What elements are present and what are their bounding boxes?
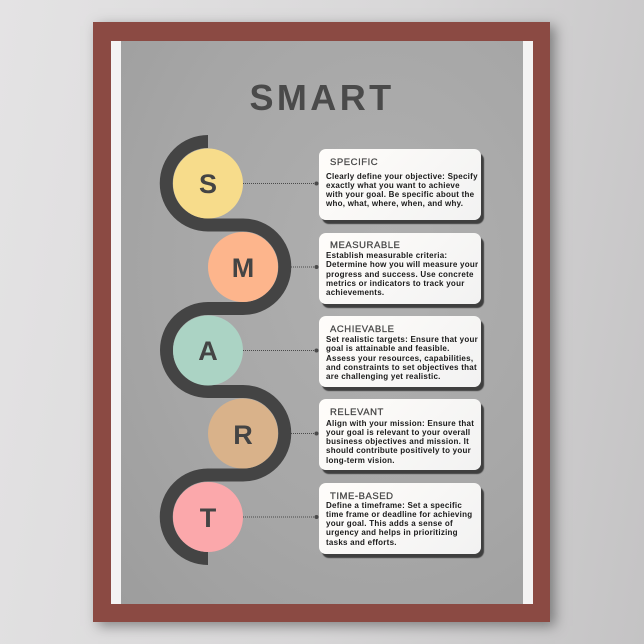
circle T: T [200, 503, 217, 533]
body: business objectives and mission. It [326, 437, 469, 446]
body: are challenging yet realistic. [326, 372, 441, 381]
winding path [166, 142, 285, 558]
circle S [173, 148, 243, 218]
body: your goal is relevant to your overall [326, 428, 470, 437]
body [326, 500, 472, 547]
circle M [208, 232, 278, 302]
circle A: A [198, 336, 218, 366]
body: long-term vision. [326, 456, 395, 465]
circle A [173, 316, 243, 386]
body: Define a timeframe: Set a specific [326, 500, 462, 510]
body [326, 172, 478, 208]
body: who, what, where, when, and why. [326, 199, 463, 208]
connectors [243, 182, 318, 519]
white mat [111, 41, 533, 604]
body: Clearly define your objective: Specify [326, 172, 478, 180]
body: goal is attainable and feasible. [326, 344, 450, 353]
card: measurable [319, 233, 481, 304]
heading: ACHIEVABLE [330, 324, 394, 335]
body: progress and success. Use concrete [326, 270, 474, 279]
body [326, 418, 474, 465]
heading: SPECIFIC [330, 157, 378, 168]
circle S: S [199, 169, 217, 199]
body: your goal. This adds a sense of [326, 519, 453, 528]
gray panel [121, 41, 523, 604]
circle R [208, 398, 278, 468]
card: relevant [319, 399, 481, 470]
body: should contribute positively to your [326, 446, 471, 455]
circle R: R [233, 420, 253, 450]
body: metrics or indicators to track your [326, 279, 465, 288]
body [326, 335, 478, 381]
body: Determine how you will measure your [326, 260, 478, 269]
body: Establish measurable criteria: [326, 251, 447, 260]
body: exactly what you want to achieve [326, 181, 460, 190]
body: and constraints to set objectives that [326, 363, 477, 372]
body: time frame or deadline for achieving [326, 510, 472, 519]
body: tasks and efforts. [326, 538, 397, 547]
title: SMART [250, 77, 394, 118]
poster frame [93, 22, 550, 622]
body: with your goal. Be specific about the [326, 190, 474, 199]
body: Set realistic targets: Ensure that your [326, 335, 478, 344]
body: Assess your resources, capabilities, [326, 354, 473, 363]
circle M: M [232, 253, 254, 283]
body: achievements. [326, 288, 384, 297]
heading: RELEVANT [330, 407, 384, 418]
body [326, 251, 478, 297]
card: specific [319, 149, 481, 220]
heading: MEASURABLE [330, 240, 400, 251]
card: time-based [319, 483, 481, 554]
card: achievable [319, 316, 481, 387]
circle T [173, 482, 243, 552]
body: urgency and helps in prioritizing [326, 528, 458, 537]
heading: TIME-BASED [330, 491, 394, 502]
body: Align with your mission: Ensure that [326, 418, 474, 428]
